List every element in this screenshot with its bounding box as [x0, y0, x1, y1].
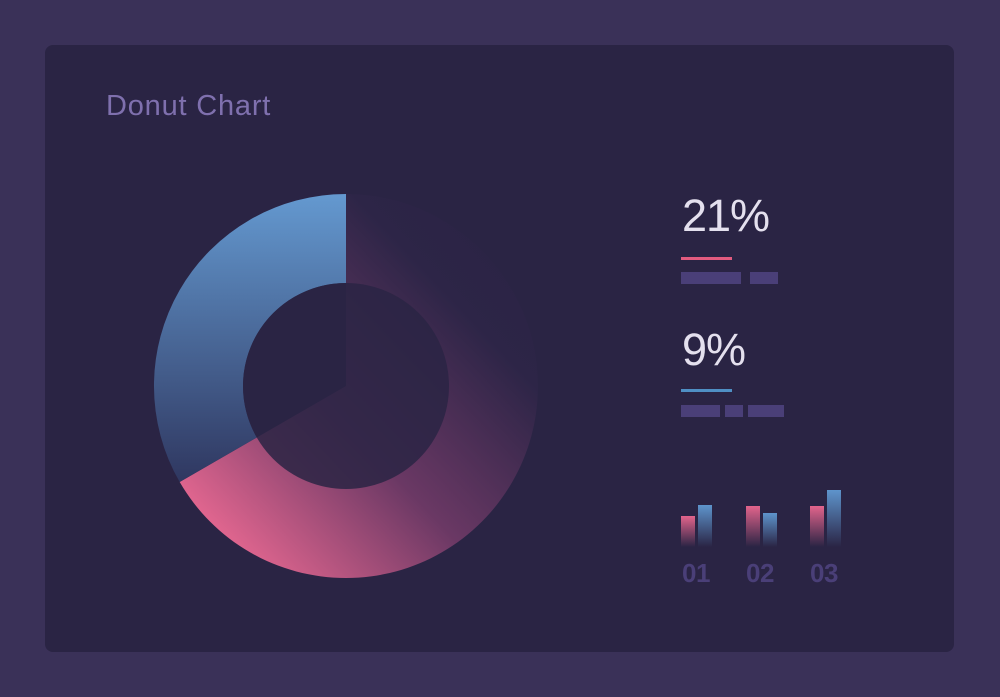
- bar chart: [681, 490, 841, 588]
- stat: 21%: 21%: [682, 190, 769, 241]
- blue segment: [154, 194, 346, 482]
- pink segment: [180, 194, 538, 578]
- stat: 9%: [681, 324, 784, 417]
- bar chart: 03: [810, 558, 838, 588]
- stat: 9%: 9%: [682, 324, 745, 375]
- donut hole: [243, 283, 449, 489]
- bar chart: 02: [746, 558, 774, 588]
- stat: 21%: [681, 190, 778, 284]
- bar labels: 01: [682, 558, 710, 588]
- panel: main card: [45, 45, 954, 652]
- title: Donut Chart: [106, 90, 271, 122]
